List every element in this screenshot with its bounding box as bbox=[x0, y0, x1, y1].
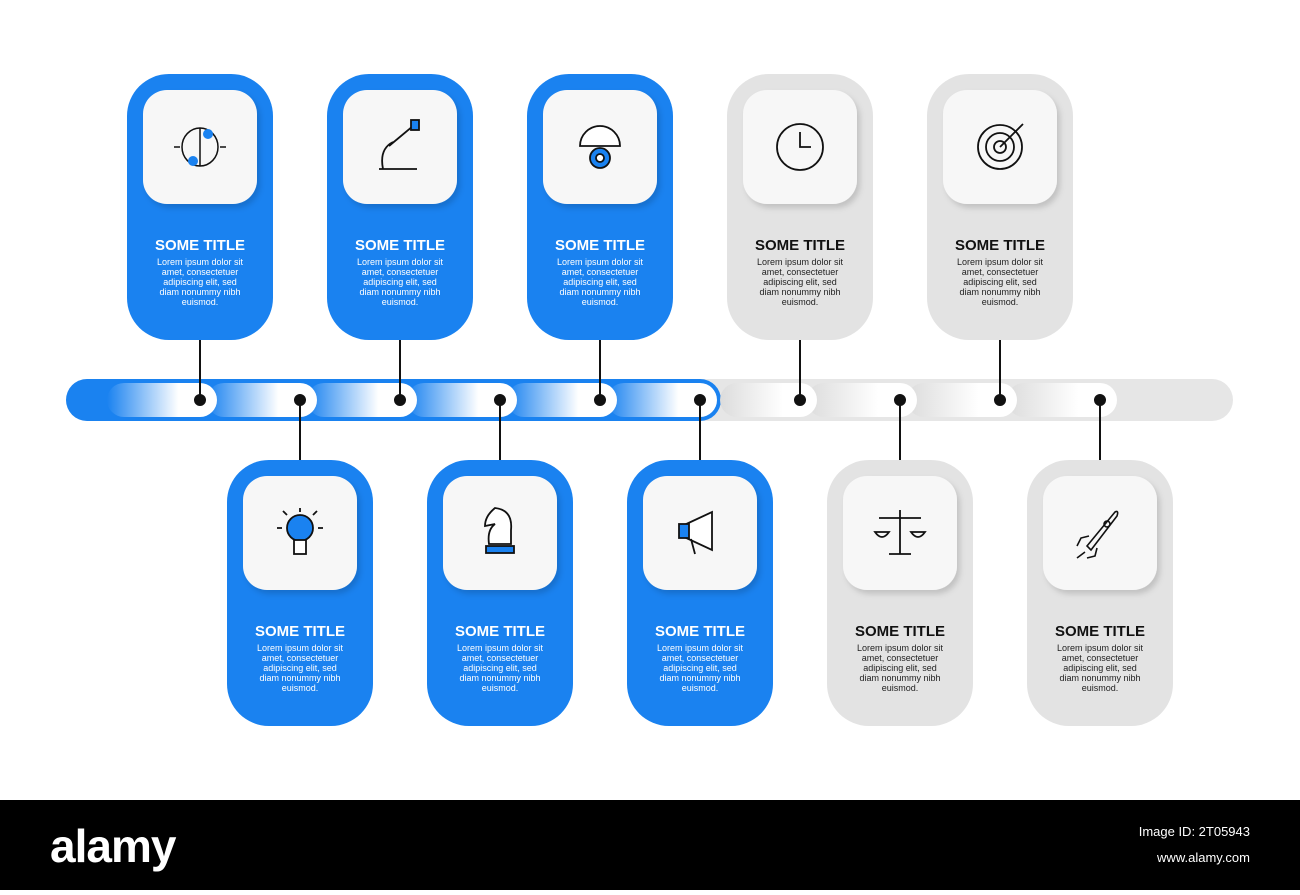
card 7: euismod. bbox=[482, 683, 518, 693]
card 8: SOME TITLE bbox=[655, 623, 745, 640]
card 8: euismod. bbox=[682, 683, 718, 693]
card 2: SOME TITLE bbox=[355, 237, 445, 254]
card 6 bbox=[227, 460, 373, 726]
card 2: amet, consectetuer bbox=[362, 267, 438, 277]
card 2: adipiscing elit, sed bbox=[363, 277, 437, 287]
footer bar: alamy bbox=[50, 820, 177, 872]
card 5: amet, consectetuer bbox=[962, 267, 1038, 277]
card 1: diam nonummy nibh bbox=[159, 287, 241, 297]
card 1 bbox=[127, 74, 273, 340]
card 10: SOME TITLE bbox=[1055, 623, 1145, 640]
icon: target bbox=[978, 124, 1023, 169]
card 4 bbox=[727, 74, 873, 340]
card 2 bbox=[327, 74, 473, 340]
card 9: diam nonummy nibh bbox=[859, 673, 941, 683]
footer bar: Image ID: 2T05943 bbox=[1139, 824, 1250, 839]
card 7: diam nonummy nibh bbox=[459, 673, 541, 683]
icon: scales bbox=[875, 510, 925, 554]
card 7: SOME TITLE bbox=[455, 623, 545, 640]
card 5: Lorem ipsum dolor sit bbox=[957, 257, 1044, 267]
card 2: euismod. bbox=[382, 297, 418, 307]
card 4: adipiscing elit, sed bbox=[763, 277, 837, 287]
card 3 bbox=[527, 74, 673, 340]
card 7: adipiscing elit, sed bbox=[463, 663, 537, 673]
card 7 bbox=[427, 460, 573, 726]
card 1: SOME TITLE bbox=[155, 237, 245, 254]
card 6: amet, consectetuer bbox=[262, 653, 338, 663]
connectors and dots bbox=[195, 340, 1105, 460]
card 6: adipiscing elit, sed bbox=[263, 663, 337, 673]
card 9: amet, consectetuer bbox=[862, 653, 938, 663]
card 7: Lorem ipsum dolor sit bbox=[457, 643, 544, 653]
card 10: Lorem ipsum dolor sit bbox=[1057, 643, 1144, 653]
card 1: adipiscing elit, sed bbox=[163, 277, 237, 287]
card 9: euismod. bbox=[882, 683, 918, 693]
card 6: euismod. bbox=[282, 683, 318, 693]
card 8 bbox=[627, 460, 773, 726]
icon: bulb bbox=[277, 508, 323, 554]
card 4: Lorem ipsum dolor sit bbox=[757, 257, 844, 267]
card 5: diam nonummy nibh bbox=[959, 287, 1041, 297]
footer bar: www.alamy.com bbox=[1156, 850, 1250, 865]
card 2: Lorem ipsum dolor sit bbox=[357, 257, 444, 267]
card 3: SOME TITLE bbox=[555, 237, 645, 254]
card 3: adipiscing elit, sed bbox=[563, 277, 637, 287]
card 9: SOME TITLE bbox=[855, 623, 945, 640]
card 8: diam nonummy nibh bbox=[659, 673, 741, 683]
card 5 bbox=[927, 74, 1073, 340]
card 8: Lorem ipsum dolor sit bbox=[657, 643, 744, 653]
icon: megaphone bbox=[679, 512, 712, 554]
card 3: amet, consectetuer bbox=[562, 267, 638, 277]
card 4: euismod. bbox=[782, 297, 818, 307]
icon: chess knight bbox=[485, 508, 514, 553]
icon: brain bbox=[174, 128, 226, 166]
card 1: Lorem ipsum dolor sit bbox=[157, 257, 244, 267]
card 10: euismod. bbox=[1082, 683, 1118, 693]
card 1: amet, consectetuer bbox=[162, 267, 238, 277]
card 10: adipiscing elit, sed bbox=[1063, 663, 1137, 673]
icon: clock bbox=[777, 124, 823, 170]
card 6: Lorem ipsum dolor sit bbox=[257, 643, 344, 653]
card 3: diam nonummy nibh bbox=[559, 287, 641, 297]
card 9: Lorem ipsum dolor sit bbox=[857, 643, 944, 653]
icon: helmet gear bbox=[580, 126, 620, 168]
card 4: diam nonummy nibh bbox=[759, 287, 841, 297]
card 3: Lorem ipsum dolor sit bbox=[557, 257, 644, 267]
card 4: SOME TITLE bbox=[755, 237, 845, 254]
card 6: diam nonummy nibh bbox=[259, 673, 341, 683]
card 10: diam nonummy nibh bbox=[1059, 673, 1141, 683]
card 7: amet, consectetuer bbox=[462, 653, 538, 663]
card 10: amet, consectetuer bbox=[1062, 653, 1138, 663]
timeline bar bbox=[66, 379, 1233, 421]
card 9 bbox=[827, 460, 973, 726]
card 3: euismod. bbox=[582, 297, 618, 307]
card 10 bbox=[1027, 460, 1173, 726]
card 4: amet, consectetuer bbox=[762, 267, 838, 277]
card 6: SOME TITLE bbox=[255, 623, 345, 640]
icon: rocket bbox=[1077, 512, 1118, 558]
card 8: adipiscing elit, sed bbox=[663, 663, 737, 673]
card 9: adipiscing elit, sed bbox=[863, 663, 937, 673]
card 2: diam nonummy nibh bbox=[359, 287, 441, 297]
card 5: SOME TITLE bbox=[955, 237, 1045, 254]
icon: microscope bbox=[379, 120, 419, 169]
card 5: euismod. bbox=[982, 297, 1018, 307]
card 1: euismod. bbox=[182, 297, 218, 307]
footer bar bbox=[0, 800, 1300, 890]
card 5: adipiscing elit, sed bbox=[963, 277, 1037, 287]
card 8: amet, consectetuer bbox=[662, 653, 738, 663]
